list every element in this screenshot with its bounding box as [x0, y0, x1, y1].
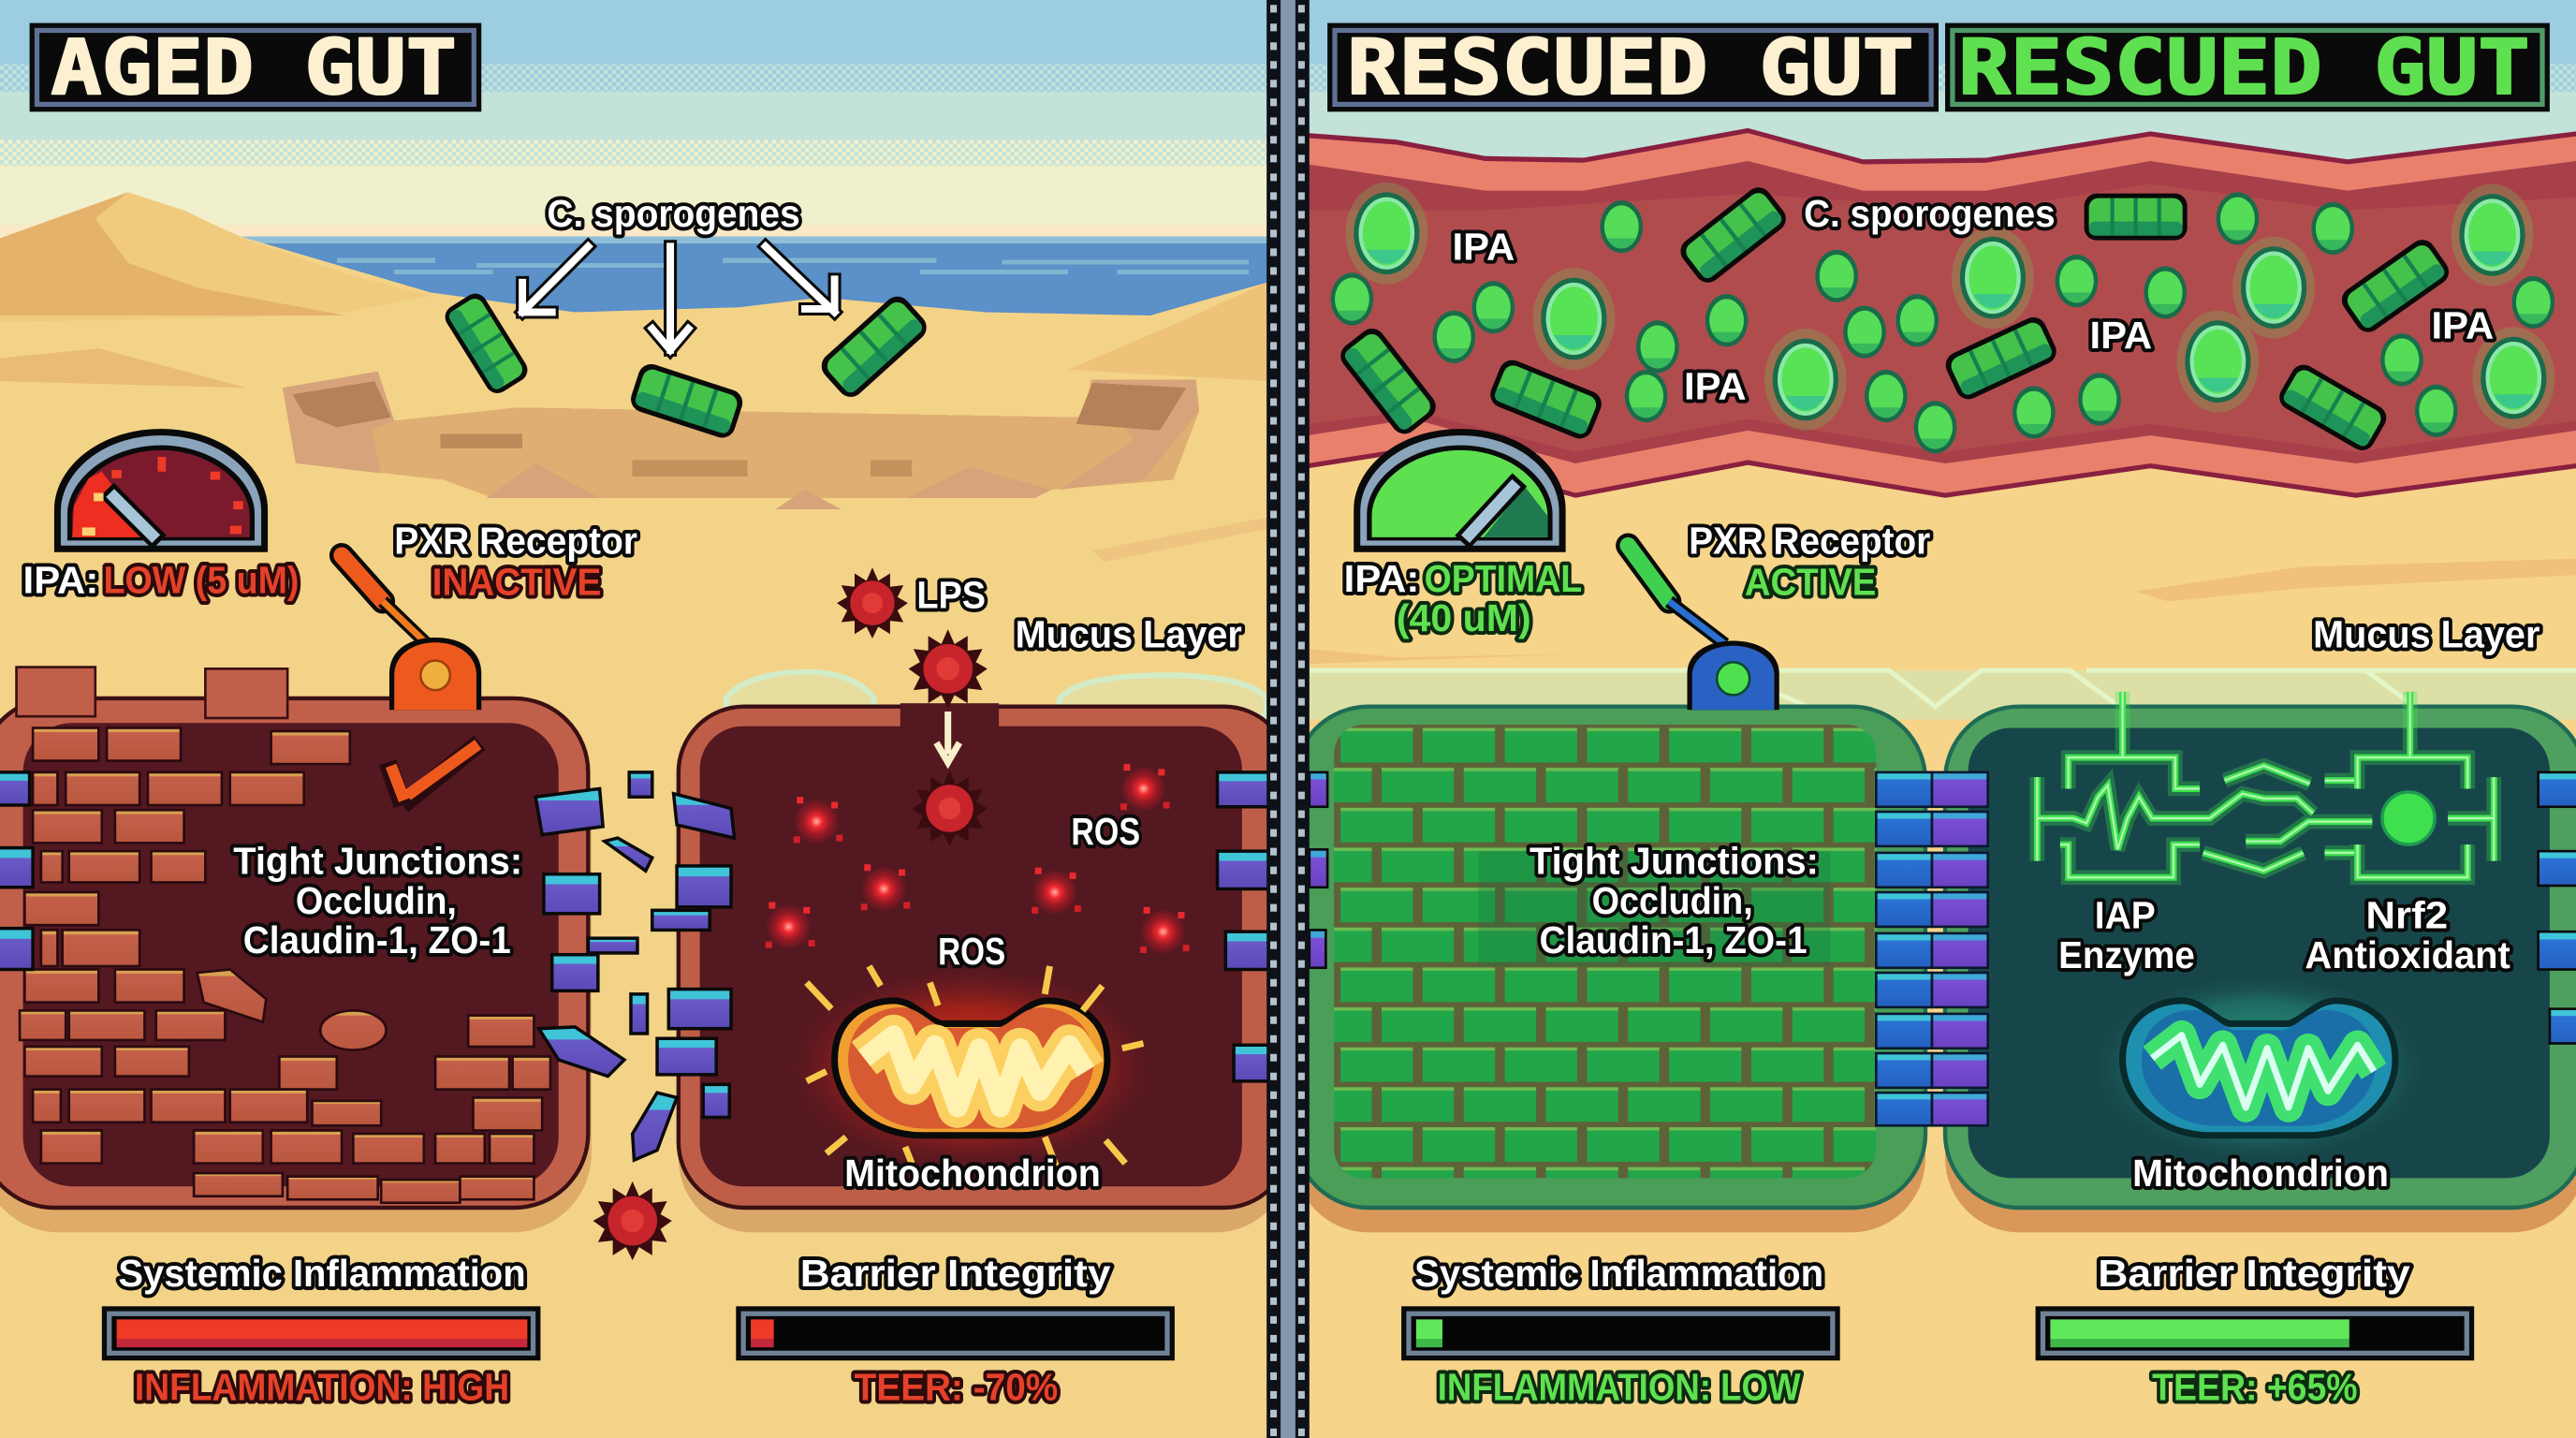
titles: rescued gut — [1327, 23, 2550, 112]
label: IPA optimal level: IPA: — [1344, 557, 1419, 600]
tight junction fragments in the gap — [0, 772, 735, 1160]
labels: aged cell annotations: Tight Junctions: — [233, 840, 522, 883]
labels: rescued cell annotations: Claudin-1, ZO-1 — [1540, 918, 1808, 961]
bar: systemic inflammation low: INFLAMMATION: LOW — [1438, 1365, 1801, 1408]
panel: aged gut background scene — [0, 0, 1268, 1438]
panel: healthy gut lumen — [1308, 128, 2576, 498]
panel: rescued gut background — [1308, 0, 2576, 1438]
pathway circuit: IAP and Nrf2 — [2037, 692, 2494, 877]
bar: barrier integrity low: Barrier Integrity — [800, 1252, 1111, 1295]
dried lake bed — [283, 372, 1199, 509]
ROS sparks — [766, 764, 1190, 955]
labels: rescued cell annotations: Mucus Layer — [2313, 613, 2540, 656]
titles: rescued gut: RESCUED GUT — [1958, 24, 2530, 112]
labels: lumen annotations: IPA — [2089, 314, 2152, 357]
LPS toxins entering — [593, 567, 988, 1260]
panel: broken epithelial cell — [0, 668, 592, 1232]
gauge: IPA low — [54, 429, 268, 552]
bar: systemic inflammation low — [1401, 1252, 1840, 1408]
bar: barrier integrity restored: TEER: +65% — [2152, 1365, 2358, 1408]
label: PXR receptor active: ACTIVE — [1745, 560, 1876, 603]
label: IPA low level — [23, 559, 299, 602]
labels: aged cell annotations: ROS — [1071, 810, 1140, 853]
label: PXR receptor inactive — [394, 519, 637, 603]
label: PXR receptor active: PXR Receptor — [1689, 519, 1931, 562]
icon: broken red pick — [388, 742, 479, 805]
labels: rescued cell annotations: IAP — [2095, 894, 2156, 937]
labels: rescued cell annotations — [1530, 613, 2540, 1195]
IPA metabolites: large — [1345, 183, 2554, 431]
labels: rescued cell annotations: Mitochondrion — [2132, 1152, 2389, 1195]
mucus layer: thick healthy — [1308, 670, 2576, 720]
lever: PXR inactive — [342, 555, 481, 710]
labels: lumen annotations — [1453, 192, 2494, 407]
membrane blocks right edge — [2539, 772, 2576, 1043]
panel: damaged enterocyte — [679, 703, 1290, 1232]
labels: lumen annotations: IPA — [1453, 225, 1515, 268]
labels: rescued cell annotations: Antioxidant — [2305, 933, 2510, 976]
labels: aged cell annotations: Claudin-1, ZO-1 — [243, 918, 511, 961]
labels: aged cell annotations: ROS — [938, 930, 1005, 973]
panel: intact epithelial cell — [1295, 707, 1925, 1232]
labels: aged cell annotations: Occludin, — [296, 879, 457, 922]
label: PXR receptor inactive: INACTIVE — [432, 560, 601, 603]
label: C. sporogenes, aged: C. sporogenes — [547, 192, 800, 235]
labels: aged cell annotations: LPS — [916, 573, 986, 616]
bar: barrier integrity restored — [2036, 1252, 2474, 1408]
label: IPA optimal level — [1344, 557, 1582, 639]
labels: rescued cell annotations: Enzyme — [2058, 933, 2195, 976]
bacteria: abundant C. sporogenes — [1336, 183, 2453, 455]
label: PXR receptor active — [1689, 519, 1931, 603]
bricks: crumbling wall — [20, 728, 550, 1203]
labels: rescued cell annotations: Occludin, — [1592, 879, 1753, 922]
membrane blocks left edge — [1310, 772, 1327, 968]
labels: aged cell annotations: Mucus Layer — [1016, 613, 1242, 656]
mitochondrion: healthy — [2088, 973, 2430, 1164]
label: IPA low level: IPA: — [23, 559, 98, 602]
labels: aged cell annotations: Mitochondrion — [844, 1152, 1101, 1195]
label: IPA optimal level: OPTIMAL — [1425, 557, 1582, 600]
labels: aged cell annotations — [233, 573, 1242, 1195]
arrow: LPS entering cell — [936, 712, 959, 762]
bar: systemic inflammation high: Systemic Inflammation — [118, 1252, 526, 1295]
label: IPA optimal level: (40 uM) — [1397, 596, 1531, 639]
title: aged gut: AGED GUT — [51, 24, 457, 112]
membrane blocks on right edge — [1218, 772, 1271, 1081]
lever: PXR active — [1628, 546, 1779, 710]
label: IPA low level: LOW (5 uM) — [104, 559, 299, 602]
bricks: intact wall — [1334, 725, 1876, 1178]
bar: systemic inflammation low: Systemic Inflammation — [1414, 1252, 1823, 1295]
bar: systemic inflammation high: INFLAMMATION: HIGH — [135, 1365, 509, 1408]
mitochondrion overheating — [787, 966, 1155, 1170]
bar: barrier integrity restored: Barrier Integrity — [2098, 1252, 2410, 1295]
sea — [230, 237, 1268, 322]
labels: rescued cell annotations: Tight Junctions: — [1530, 840, 1819, 883]
bar: systemic inflammation high — [102, 1252, 540, 1408]
bar: barrier integrity low: TEER: -70% — [855, 1365, 1058, 1408]
panel: healthy enterocyte — [1945, 692, 2576, 1232]
bacteria: scarce C. sporogenes — [441, 289, 932, 441]
labels: lumen annotations: IPA — [1684, 364, 1747, 407]
labels: lumen annotations: IPA — [2432, 304, 2494, 347]
gauge: IPA optimal — [1354, 429, 1566, 552]
center divider — [1266, 0, 1310, 1438]
labels: rescued cell annotations: Nrf2 — [2365, 894, 2448, 937]
label: PXR receptor inactive: PXR Receptor — [394, 519, 637, 562]
titles: rescued gut: RESCUED GUT — [1347, 24, 1914, 112]
IPA metabolites: small — [1331, 192, 2554, 453]
labels: lumen annotations: C. sporogenes — [1804, 192, 2056, 235]
tight junction column: sealed — [1876, 772, 1988, 1125]
bar: barrier integrity low — [736, 1252, 1175, 1408]
mucus layer humps aged — [726, 672, 1266, 716]
arrows to bacteria — [522, 246, 835, 350]
